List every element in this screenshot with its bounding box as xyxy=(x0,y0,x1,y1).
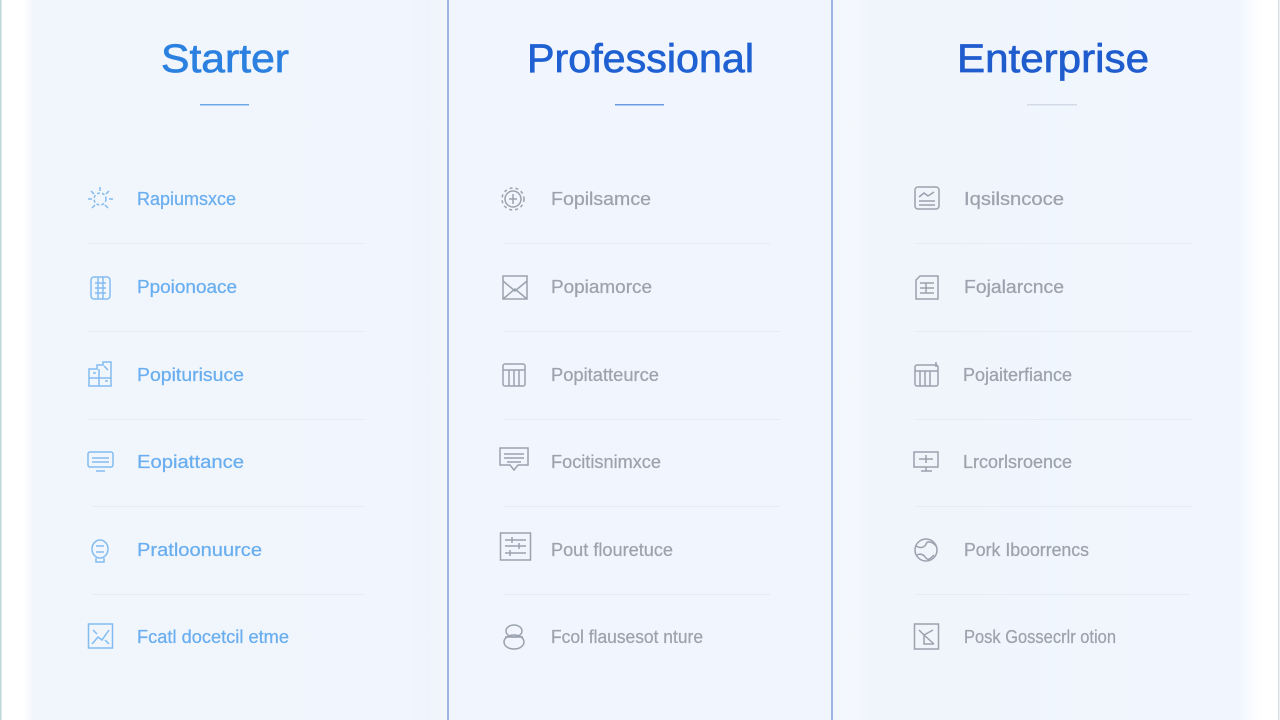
label: Pratloonuurce xyxy=(137,540,262,560)
row 1 xyxy=(88,187,236,209)
label: Iqsilsncoce xyxy=(964,189,1064,209)
row 4 xyxy=(500,448,661,472)
panel border xyxy=(448,0,832,720)
icon: calendar columns xyxy=(915,362,938,386)
panel: enterprise xyxy=(914,37,1192,649)
label: Fopilsamce xyxy=(551,189,651,209)
label: Fcatl docetcil etme xyxy=(137,627,289,647)
icon: globe xyxy=(915,539,937,561)
label: Lrcorlsroence xyxy=(963,452,1072,472)
icon: gear xyxy=(502,188,524,210)
heading: Professional: Professional xyxy=(527,37,754,81)
label: Rapiumsxce xyxy=(137,189,236,209)
row 4 xyxy=(88,452,244,472)
row 3 xyxy=(503,364,659,386)
label: Fojalarcnce xyxy=(964,277,1064,297)
icon: stacked bowl xyxy=(504,625,524,649)
label: Pojaiterfiance xyxy=(963,365,1072,385)
icon: monitor xyxy=(88,452,113,471)
heading: Enterprise: Enterprise xyxy=(957,37,1149,81)
label: Focitisnimxce xyxy=(551,452,661,472)
label: Pout flouretuce xyxy=(551,540,673,560)
icon: document grid xyxy=(916,276,938,299)
row 2 xyxy=(91,277,237,299)
icon: monitor network xyxy=(914,452,938,471)
row 5 xyxy=(92,540,262,562)
row 2 xyxy=(503,276,652,299)
icon: chart frame xyxy=(88,624,112,648)
heading underline xyxy=(615,104,664,106)
label: Popiamorce xyxy=(551,277,652,297)
label: Eopiattance xyxy=(137,452,244,472)
label: Fcol flausesot nture xyxy=(551,627,703,647)
row 6 xyxy=(504,625,703,649)
icon: framed chart xyxy=(914,624,938,649)
heading underline xyxy=(1027,104,1077,106)
label: Popitatteurce xyxy=(551,365,659,385)
row 5 xyxy=(915,539,1089,561)
icon: burst xyxy=(88,187,113,208)
label: Pork Iboorrencs xyxy=(964,540,1089,560)
row 1 xyxy=(502,188,651,210)
label: Ppoionoace xyxy=(137,277,237,297)
icon: dashboard xyxy=(915,187,939,209)
label: Posk Gossecrlr otion xyxy=(964,627,1116,647)
icon: message xyxy=(500,448,528,470)
heading: Starter: Starter xyxy=(161,37,289,81)
icon: head xyxy=(92,540,108,562)
row 3 xyxy=(915,362,1072,386)
icon: columns xyxy=(503,364,525,386)
heading underline xyxy=(200,104,249,106)
row 5 xyxy=(500,533,673,560)
row 6 xyxy=(914,624,1116,649)
row 1 xyxy=(915,187,1064,209)
label: Popiturisuce xyxy=(137,365,244,385)
panel: starter xyxy=(88,37,365,648)
icon: building xyxy=(91,277,110,299)
row 3 xyxy=(89,362,244,386)
row 4 xyxy=(914,452,1072,472)
icon: sliders panel xyxy=(500,533,530,560)
row 2 xyxy=(916,276,1064,299)
row 6 xyxy=(88,624,289,648)
icon: blocks xyxy=(89,362,111,386)
panel: professional xyxy=(448,0,832,720)
icon: envelope xyxy=(503,276,527,299)
